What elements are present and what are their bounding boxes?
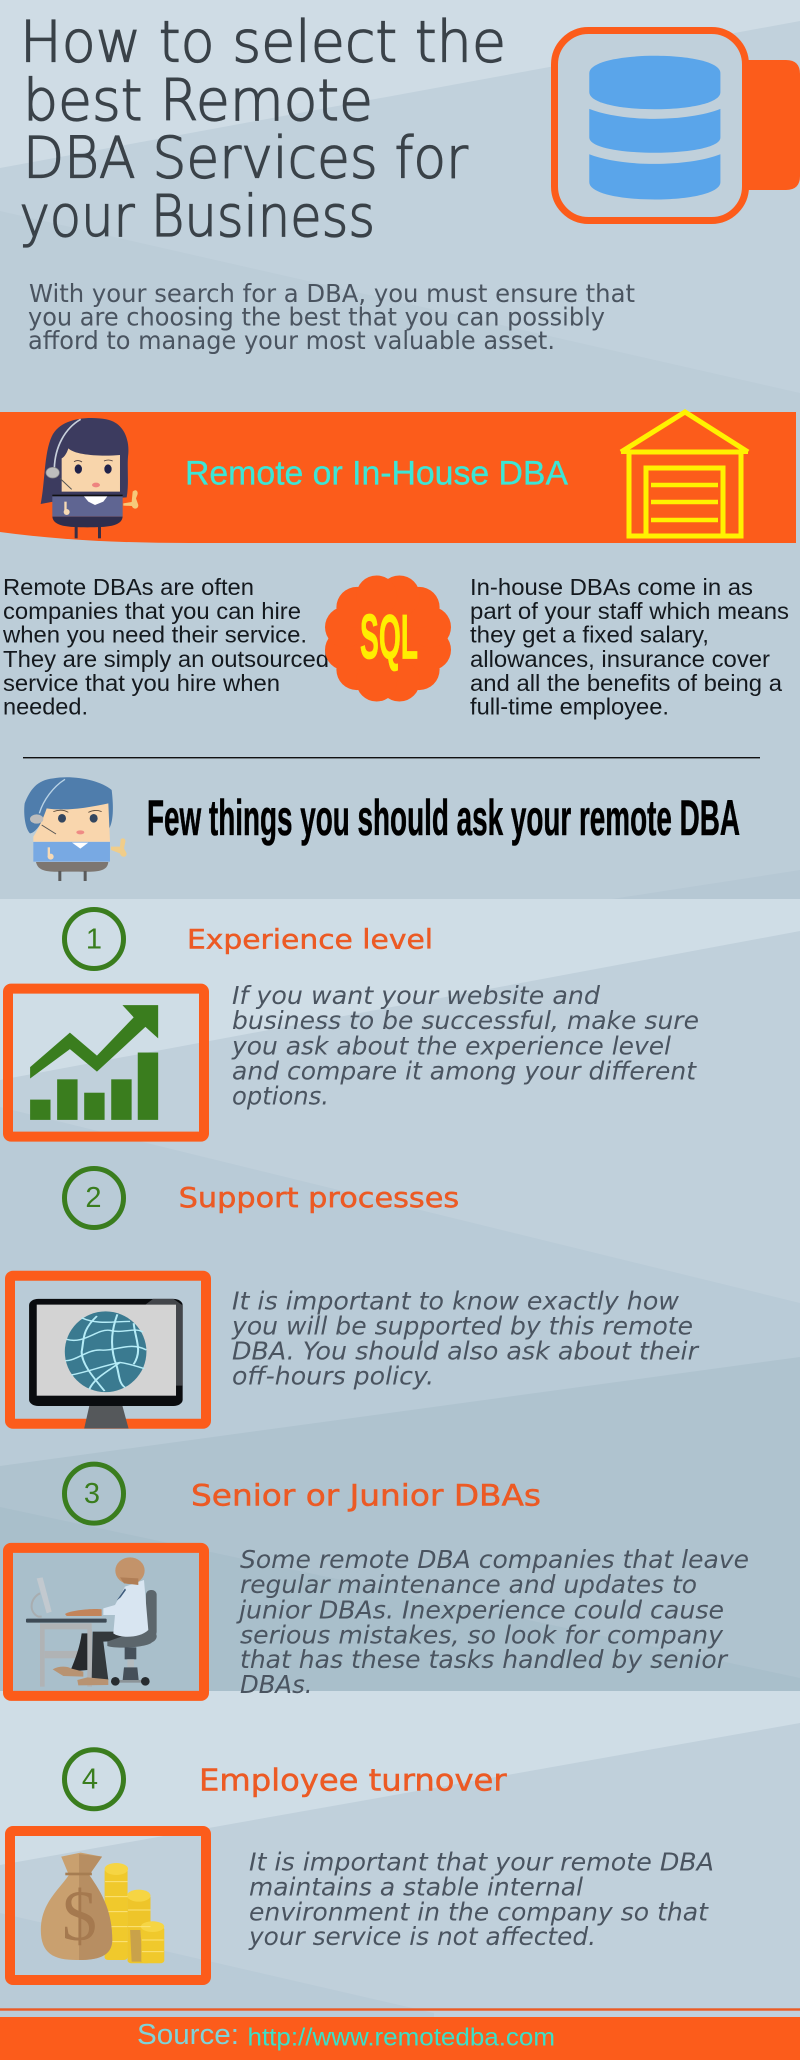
body text 2 xyxy=(231,1287,700,1391)
body text 3: regular maintenance and updates to xyxy=(240,1570,697,1599)
badge: SQL: SQL xyxy=(360,603,418,673)
text: remote DBAs: service that you hire when xyxy=(3,670,280,696)
text: in-house DBAs: and all the benefits of being a xyxy=(470,670,783,696)
title: best Remote xyxy=(23,68,373,134)
badge: SQL xyxy=(325,576,451,702)
icon: female operator xyxy=(41,418,138,538)
number 1 xyxy=(64,910,124,968)
body text 4: maintains a stable internal xyxy=(249,1873,583,1902)
heading: senior or junior: Senior or Junior DBAs xyxy=(191,1478,541,1512)
text: remote DBAs: needed. xyxy=(3,694,88,720)
body text 3: junior DBAs. Inexperience could cause xyxy=(236,1596,724,1625)
text: remote DBAs: Remote DBAs are often xyxy=(3,574,254,600)
intro text: afford to manage your most valuable asset. xyxy=(28,326,555,355)
footer: source: Source: xyxy=(137,2019,239,2051)
icon: monitor with globe xyxy=(10,1276,206,1429)
text: remote DBAs: companies that you can hire xyxy=(3,598,301,624)
footer: source: http://www.remotedba.com xyxy=(248,2024,555,2052)
body text 4: environment in the company so that xyxy=(249,1898,709,1927)
icon: database xyxy=(554,30,800,220)
panel: step 4 xyxy=(10,1750,714,1980)
text: in-house DBAs: part of your staff which means xyxy=(470,598,789,624)
number 1: 1 xyxy=(86,923,102,955)
panel: remote or in-house banner xyxy=(0,412,796,543)
icon: money bag and coins: $ xyxy=(62,1876,97,1956)
number 4 xyxy=(64,1750,124,1809)
body text 3: DBAs. xyxy=(240,1670,312,1699)
body text 4: It is important that your remote DBA xyxy=(249,1848,714,1877)
panel: step 1 xyxy=(8,910,699,1137)
body text 3: Some remote DBA companies that leave xyxy=(240,1545,749,1574)
body text 2: DBA. You should also ask about their xyxy=(232,1337,700,1366)
title: your Business xyxy=(20,184,375,250)
banner heading: Remote or In-House DBA xyxy=(185,455,568,493)
body text 1: and compare it among your different xyxy=(232,1056,697,1085)
body text 4: your service is not affected. xyxy=(248,1922,596,1951)
text: in-house DBAs xyxy=(470,574,789,720)
title xyxy=(20,10,506,250)
icon: male operator xyxy=(24,777,127,881)
body text 1: options. xyxy=(232,1082,329,1111)
title: DBA Services for xyxy=(23,126,469,192)
number 3 xyxy=(64,1464,124,1523)
panel: step 2 xyxy=(10,1168,700,1429)
number 4: 4 xyxy=(82,1763,98,1795)
title: How to select the xyxy=(20,10,506,76)
number 2 xyxy=(64,1168,124,1228)
text: in-house DBAs: they get a fixed salary, xyxy=(470,622,709,648)
text: remote DBAs: when you need their service. xyxy=(2,622,307,648)
number 3: 3 xyxy=(84,1478,100,1510)
heading: support processes: Support processes xyxy=(179,1181,459,1214)
body text 2: you will be supported by this remote xyxy=(231,1312,693,1341)
text: remote DBAs: They are simply an outsourced xyxy=(3,646,329,672)
icon: growth chart xyxy=(8,989,204,1137)
body text 4 xyxy=(248,1848,714,1951)
body text 1 xyxy=(231,981,699,1111)
intro text: you are choosing the best that you can possibly xyxy=(28,303,605,332)
body text 3 xyxy=(236,1545,749,1699)
heading: experience level: Experience level xyxy=(187,924,433,955)
body text 1: business to be successful, make sure xyxy=(232,1006,699,1035)
text: in-house DBAs: full-time employee. xyxy=(470,694,669,720)
text: remote DBAs xyxy=(2,574,329,720)
intro text: With your search for a DBA, you must ensure that xyxy=(29,279,635,308)
body text 1: you ask about the experience level xyxy=(231,1031,671,1060)
heading: employee turnover: Employee turnover xyxy=(199,1764,507,1799)
panel: step 3 xyxy=(8,1464,749,1699)
body text 2: It is important to know exactly how xyxy=(232,1287,680,1316)
text: in-house DBAs: allowances, insurance cover xyxy=(470,646,770,672)
icon: person at desk xyxy=(8,1548,204,1696)
icon: garage xyxy=(621,412,748,536)
body text 1: If you want your website and xyxy=(232,981,600,1010)
intro text xyxy=(28,279,635,355)
icon: money bag and coins xyxy=(10,1831,206,1980)
footer: source xyxy=(0,2017,800,2060)
body text 3: serious mistakes, so look for company xyxy=(240,1621,724,1650)
body text 2: off-hours policy. xyxy=(232,1362,434,1391)
number 2: 2 xyxy=(85,1182,102,1214)
text: in-house DBAs: In-house DBAs come in as xyxy=(470,574,753,600)
body text 3: that has these tasks handled by senior xyxy=(240,1645,729,1674)
